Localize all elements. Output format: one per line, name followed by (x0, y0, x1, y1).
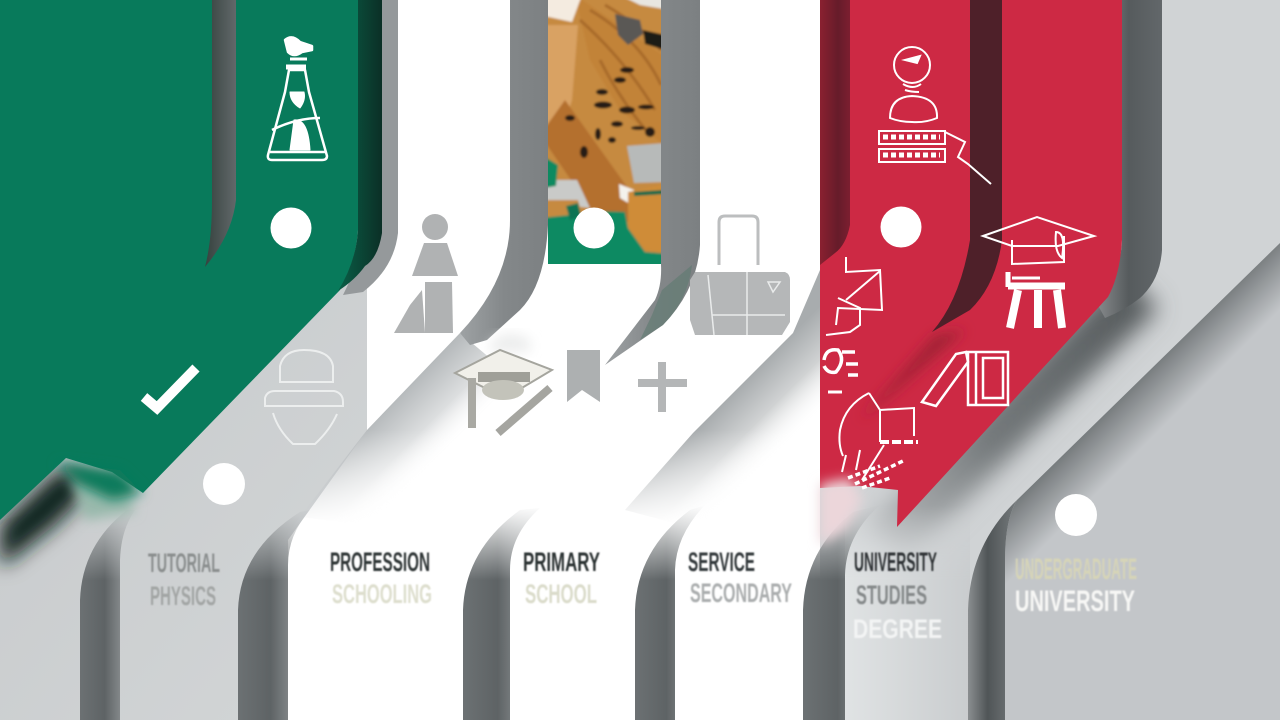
label: primary: SCHOOL (525, 579, 597, 609)
label: undergraduate (1015, 553, 1137, 618)
label: tutorial (148, 548, 220, 611)
marker: dots (203, 206, 1097, 536)
fold: bottom folds (80, 505, 880, 720)
icon: person grey (394, 214, 458, 333)
label: university: DEGREE (853, 614, 942, 644)
image panel: tiger fur (548, 0, 661, 264)
label: tutorial: TUTORIAL (148, 548, 220, 578)
icon: backpack grey (690, 216, 790, 335)
icon: mortarboard on stool (983, 217, 1094, 328)
icon: open box sketch (824, 257, 882, 392)
fold: far right diagonal (1005, 243, 1280, 720)
shading: shadow under red ribbon (885, 290, 1140, 545)
panel: red ribbon (820, 0, 1122, 545)
fold: between white ribbon and image (460, 0, 548, 345)
icon: globe on books (879, 47, 991, 184)
panel: light ribbon bottom right (845, 519, 935, 720)
label: university: STUDIES (856, 580, 927, 610)
label: primary (523, 547, 600, 609)
label: service (688, 547, 792, 608)
label: university: UNIVERSITY (854, 547, 937, 577)
icon: helmet with face (265, 350, 343, 444)
icon: graduation cap grey (455, 334, 552, 433)
label: primary: PRIMARY (523, 547, 600, 577)
fold: green ribbon right (338, 0, 398, 295)
label: service: SECONDARY (690, 578, 792, 608)
fold: far right bottom (968, 500, 1017, 720)
icon: books (922, 352, 1008, 406)
icon: check mark (144, 368, 196, 408)
label: profession (330, 547, 432, 609)
shading: diagonal under left white ribbon (310, 333, 487, 510)
icon: flask (268, 37, 327, 160)
label: profession: PROFESSION (330, 547, 430, 577)
label: undergraduate: UNIVERSITY (1015, 585, 1135, 618)
icon: animal sketch (839, 393, 918, 488)
fold: right of red ribbon (1095, 0, 1162, 318)
fold: green ribbon inner (205, 0, 236, 267)
icon: bookmark grey (567, 350, 600, 402)
shading: diagonal under right white ribbon (625, 270, 820, 530)
panel: green ribbon (0, 0, 358, 565)
label: profession: SCHOOLING (332, 579, 432, 609)
label: tutorial: PHYSICS (150, 581, 216, 611)
label: university (853, 547, 942, 644)
panel: white ribbons (288, 0, 820, 720)
label: service: SERVICE (688, 547, 755, 577)
fold: right of image (605, 0, 700, 365)
panel: grey ribbon left (0, 270, 367, 720)
icon: plus grey (638, 362, 687, 412)
